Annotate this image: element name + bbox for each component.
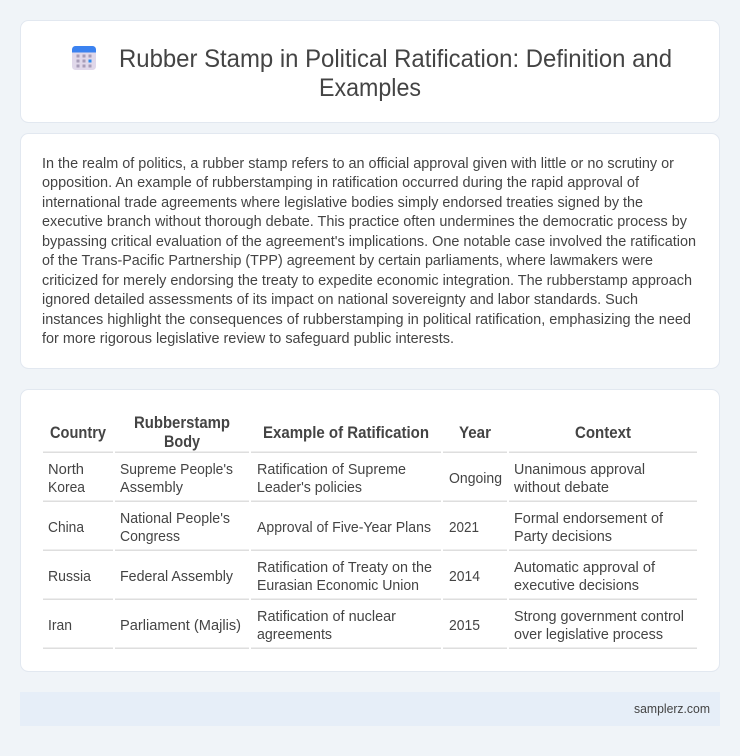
table row: China: China	[48, 520, 85, 536]
footer	[20, 692, 720, 726]
table row: North Korea: Unanimous approval	[514, 462, 645, 478]
table header row: Year	[459, 424, 492, 442]
table row: Russia: Federal Assembly	[120, 569, 234, 585]
table row: Russia: Ratification of Treaty on the	[257, 560, 432, 576]
table row: Iran: agreements	[257, 627, 332, 643]
table row: Iran: Parliament (Majlis)	[120, 618, 241, 634]
text block: description paragraph: for more rigorous legislative review to safeguard public interests.	[42, 331, 454, 347]
table row: North Korea: without debate	[513, 480, 609, 496]
table header row: Country	[50, 424, 106, 442]
table row: Russia: Eurasian Economic Union	[257, 578, 419, 594]
table row: Iran: 2015	[449, 618, 480, 634]
panel: header	[20, 20, 720, 122]
table row: China: 2021	[449, 520, 479, 536]
table row: North Korea: North	[48, 462, 84, 478]
table header row: Rubberstamp	[134, 414, 230, 432]
footer: samplerz.com	[634, 701, 710, 716]
table row: Iran: Iran	[48, 618, 72, 634]
table row: China: Party decisions	[514, 529, 612, 545]
panel: description	[20, 134, 720, 368]
table row: Iran: Strong government control	[514, 609, 684, 625]
text block: description paragraph: executive branch without thorough debate. This practice often undermines the democratic process by	[42, 214, 688, 230]
table row: China: National People's	[120, 511, 230, 527]
text block: description paragraph: instances highlight the consequences of rubberstamping in political ratification, emphasizing the need	[42, 312, 691, 328]
table row: North Korea	[48, 462, 645, 496]
table header row: Body	[164, 433, 200, 451]
icon: calendar	[72, 46, 96, 70]
table row: North Korea: Ongoing	[449, 471, 502, 487]
table row: Iran: over legislative process	[514, 627, 663, 643]
table row: China: Approval of Five-Year Plans	[257, 520, 431, 536]
table row: North Korea: Assembly	[120, 480, 184, 496]
table row: North Korea: Leader's policies	[257, 480, 362, 496]
table header row: Context	[575, 424, 632, 442]
text block: description paragraph	[42, 156, 696, 347]
table row: North Korea: Korea	[48, 480, 86, 496]
text block: description paragraph: criticized for merely endorsing the treaty to expedite economic integration. The rubberstamp approach	[42, 273, 692, 289]
text block: description paragraph: opposition. An example of rubberstamping in ratification occurred during the rapid approval of	[42, 175, 640, 191]
text block: description paragraph: ignored detailed assessments of its impact on national sovereignty and labor standards. Such	[42, 292, 638, 308]
table row: Russia: executive decisions	[514, 578, 639, 594]
title: Rubber Stamp in Political Ratification: Definition and	[119, 46, 672, 73]
table row: Russia	[48, 560, 656, 594]
table header row: Example of Ratification	[263, 424, 429, 442]
table row: North Korea: Ratification of Supreme	[257, 462, 406, 478]
table row: Russia: 2014	[449, 569, 480, 585]
text block: description paragraph: bypassing critical evaluation of the agreement's implications. One notable case involved the ratification	[42, 234, 696, 250]
table header row	[50, 414, 632, 451]
table row: North Korea: Supreme People's	[120, 462, 233, 478]
table row: Russia: Russia	[48, 569, 92, 585]
text block: description paragraph: In the realm of politics, a rubber stamp refers to an official approval given with little or no scrutiny or	[42, 156, 674, 172]
title: Examples	[319, 75, 421, 102]
panel: table	[20, 390, 720, 672]
table row: China	[48, 511, 664, 545]
text block: description paragraph: international trade agreements where legislative bodies simply endorsed treaties signed by the	[42, 195, 643, 211]
table row: Russia: Automatic approval of	[514, 560, 656, 576]
table row: Iran: Ratification of nuclear	[257, 609, 396, 625]
table row: China: Formal endorsement of	[514, 511, 664, 527]
table row: Iran	[48, 609, 684, 643]
title	[119, 46, 672, 102]
text block: description paragraph: of the Trans-Pacific Partnership (TPP) agreement by certain parliaments, where lawmakers were	[42, 253, 653, 269]
table row: China: Congress	[120, 529, 180, 545]
